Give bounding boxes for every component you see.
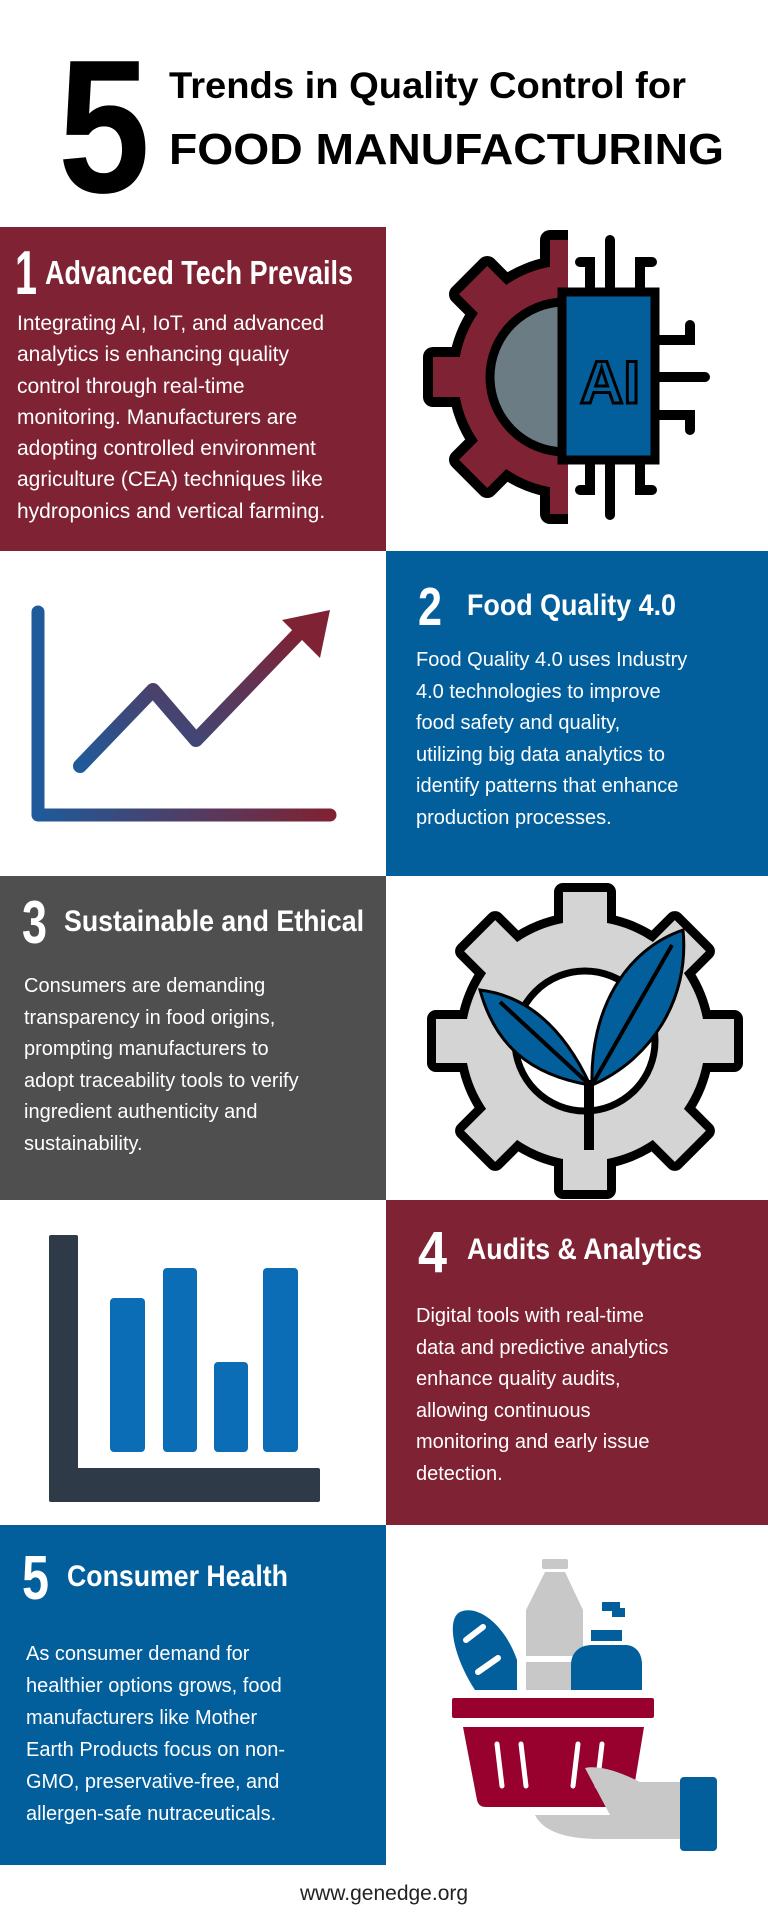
body 3: prompting manufacturers to	[24, 1038, 269, 1060]
body 1: adopting controlled environment	[17, 437, 316, 460]
body 3: transparency in food origins,	[24, 1007, 275, 1029]
heading 5	[22, 1544, 288, 1613]
body 2: identify patterns that enhance	[416, 775, 678, 797]
heading 2	[418, 577, 676, 637]
body 2: utilizing big data analytics to	[416, 744, 665, 766]
panel: 4 audits	[386, 1200, 768, 1525]
body 2: food safety and quality,	[416, 712, 620, 734]
body 5: healthier options grows, food	[26, 1675, 282, 1697]
body 5: Earth Products focus on non-	[26, 1739, 285, 1761]
body 3: ingredient authenticity and	[24, 1101, 258, 1123]
footer url: www.genedge.org	[300, 1882, 468, 1905]
body 3: adopt traceability tools to verify	[24, 1070, 299, 1092]
body 1: Integrating AI, IoT, and advanced	[17, 312, 324, 335]
body 3: Consumers are demanding	[24, 975, 265, 997]
heading 3: 3	[22, 889, 47, 956]
heading 4	[418, 1220, 702, 1285]
title: line 2: FOOD MANUFACTURING	[169, 125, 724, 174]
body 1: monitoring. Manufacturers are	[17, 406, 297, 429]
body 1: agriculture (CEA) techniques like	[17, 468, 323, 491]
heading 2: 2	[418, 577, 442, 637]
body 5	[26, 1643, 285, 1825]
heading 3	[22, 889, 364, 956]
heading 4: Audits & Analytics	[467, 1233, 702, 1266]
icon: AI gear	[423, 230, 710, 524]
body 4: data and predictive analytics	[416, 1337, 668, 1359]
panel: 2 food quality 4.0	[386, 551, 768, 876]
body 3: sustainability.	[24, 1133, 143, 1155]
body 1: analytics is enhancing quality	[17, 343, 289, 366]
icon: gear with leaves	[427, 883, 743, 1199]
heading 4: 4	[418, 1220, 447, 1285]
panel: 1 advanced tech	[0, 227, 386, 551]
title	[58, 21, 724, 210]
body 1: control through real-time	[17, 375, 245, 398]
body 5: As consumer demand for	[26, 1643, 249, 1665]
heading 2: Food Quality 4.0	[467, 589, 676, 622]
body 4: Digital tools with real-time	[416, 1305, 644, 1327]
body 1: hydroponics and vertical farming.	[17, 500, 325, 523]
body 2	[416, 649, 688, 829]
body 4: monitoring and early issue	[416, 1431, 649, 1453]
icon: AI gear: AI	[580, 349, 640, 416]
body 3	[24, 975, 299, 1155]
body 4: allowing continuous	[416, 1400, 591, 1422]
title: line 1: Trends in Quality Control for	[169, 65, 686, 106]
body 4: enhance quality audits,	[416, 1368, 621, 1390]
body 4: detection.	[416, 1463, 503, 1485]
panel: 3 sustainable	[0, 876, 386, 1200]
body 2: Food Quality 4.0 uses Industry	[416, 649, 687, 671]
heading 5: Consumer Health	[67, 1560, 288, 1593]
body 5: allergen-safe nutraceuticals.	[26, 1803, 276, 1825]
body 2: 4.0 technologies to improve	[416, 681, 661, 703]
panel: 5 consumer health	[0, 1525, 386, 1865]
body 5: GMO, preservative-free, and	[26, 1771, 279, 1793]
body 4	[416, 1305, 668, 1485]
body 1	[17, 312, 325, 523]
heading 5: 5	[22, 1544, 49, 1613]
body 2: production processes.	[416, 807, 612, 829]
body 5: manufacturers like Mother	[26, 1707, 257, 1729]
heading 1: 1	[15, 239, 37, 307]
icon: bar chart	[49, 1235, 320, 1502]
icon: trend chart	[32, 606, 336, 822]
heading 1	[15, 239, 353, 307]
